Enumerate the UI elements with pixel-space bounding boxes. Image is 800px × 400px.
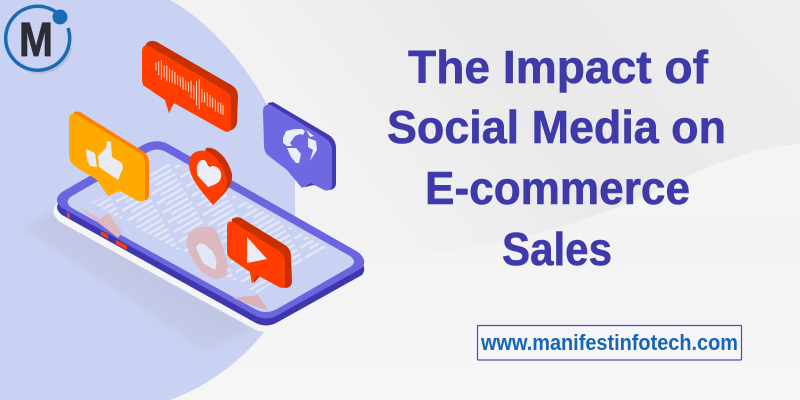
- title line 2: Social Media on: [387, 101, 726, 153]
- phone screen: [68, 150, 354, 312]
- phone shadow: [22, 210, 255, 352]
- heart reflection: [187, 226, 228, 279]
- lavender backdrop shape: [0, 0, 295, 400]
- logo letter: M: [19, 14, 53, 67]
- logo: [6, 6, 71, 73]
- title line 3: E-commerce: [425, 162, 690, 214]
- logo ring: [6, 6, 70, 70]
- title: [387, 41, 726, 275]
- icon: thumbs up bubble: [69, 112, 149, 202]
- icon: voice message bubble: [142, 41, 238, 132]
- logo ring shadow: [10, 48, 71, 73]
- icon: globe bubble: [263, 102, 336, 190]
- illustration: smartphone: [53, 141, 370, 332]
- title line 4: Sales: [502, 223, 612, 275]
- screen text lines: [92, 160, 327, 293]
- website link box: [478, 326, 742, 360]
- triangle reflection: [233, 295, 268, 310]
- logo dot: [52, 10, 68, 24]
- title line 1: The Impact of: [408, 41, 709, 93]
- phone side: [57, 148, 364, 326]
- phone base shadow edge: [53, 154, 370, 332]
- website link box: www.manifestinfotech.com: [480, 330, 738, 355]
- icon: heart pin: [189, 148, 232, 205]
- thumb reflection: [77, 206, 122, 238]
- phone face: [57, 141, 364, 318]
- speaker dots: [281, 276, 349, 317]
- phone buttons: [67, 212, 127, 250]
- icon: play video bubble: [227, 217, 292, 288]
